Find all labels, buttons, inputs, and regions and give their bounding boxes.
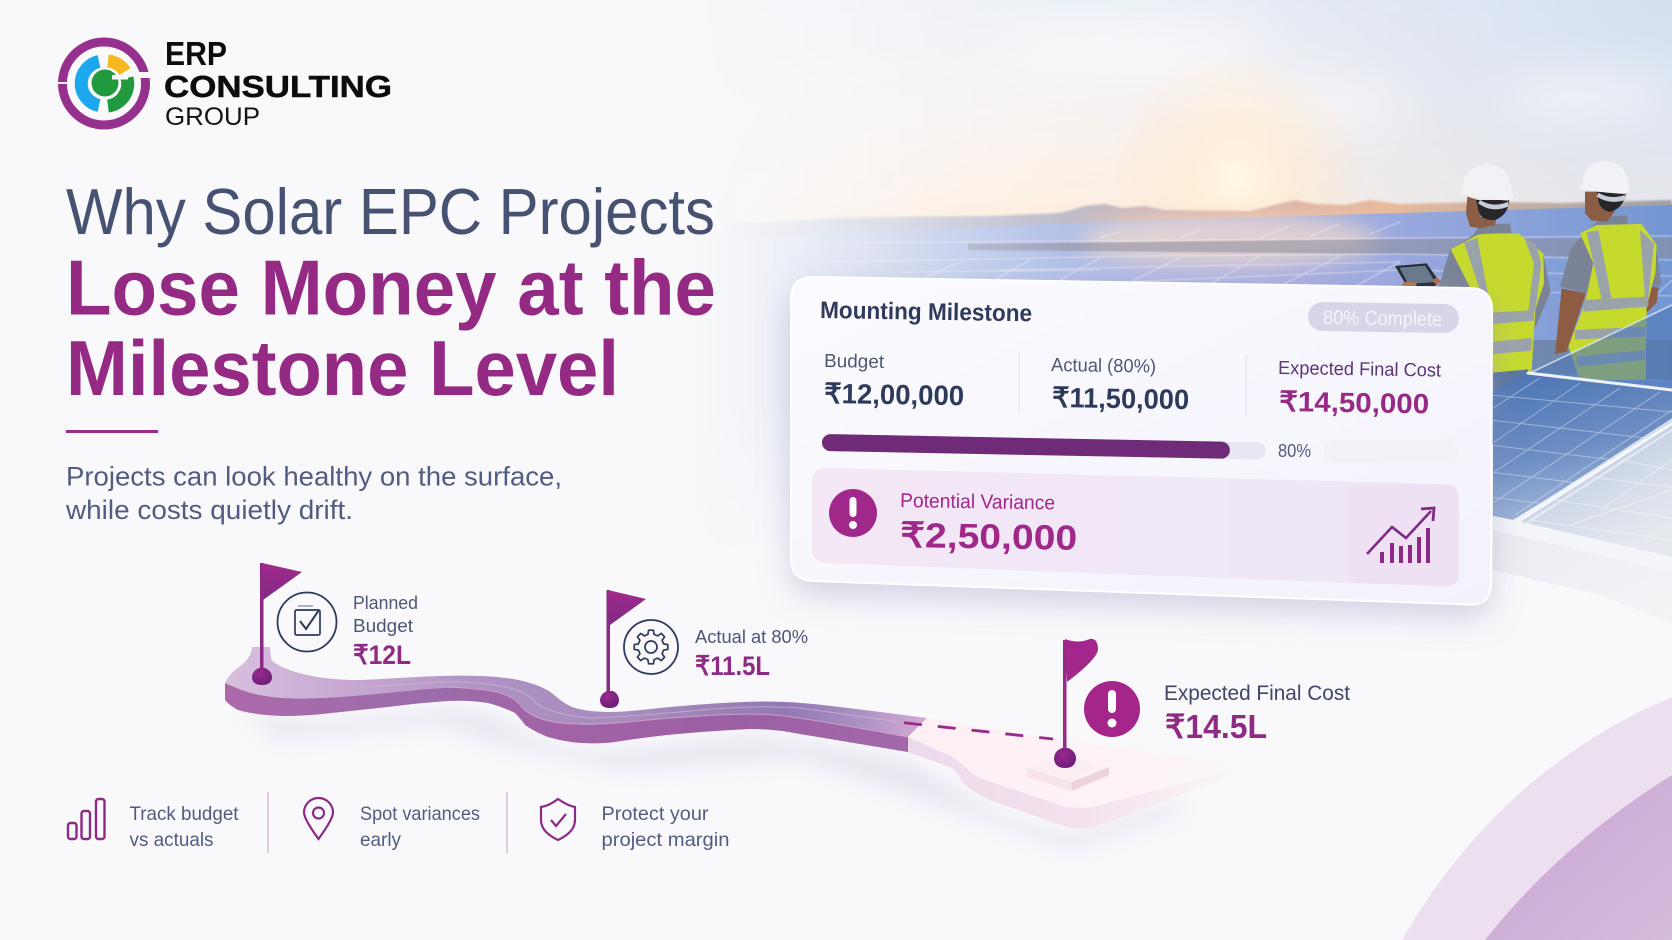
- photo bottom fade: [766, 524, 790, 542]
- dashed projection line: [897, 722, 1053, 739]
- logo wordmark: ERP: [165, 35, 227, 72]
- worker: second engineer: [1555, 161, 1662, 380]
- label: [695, 626, 808, 681]
- milestone road: [225, 647, 1235, 850]
- stat: actual: Actual (80%): [1051, 355, 1156, 378]
- field rows: [860, 221, 1672, 300]
- foreground glass panels: [1490, 305, 1672, 623]
- road centre line: [360, 682, 900, 722]
- logo: ERP Consulting Group: [56, 35, 392, 131]
- text: [360, 803, 480, 851]
- variance panel: ₹2,50,000: [900, 516, 1077, 558]
- text: early: [360, 829, 401, 851]
- shirt: [1560, 216, 1662, 294]
- icon: alert: [1084, 681, 1140, 737]
- variance panel: [812, 468, 1459, 587]
- stat: expected final cost: Expected Final Cost: [1278, 358, 1442, 382]
- decorative corner arcs: [1402, 697, 1672, 940]
- completion badge: [1308, 302, 1459, 333]
- label: Actual at 80%: [695, 626, 808, 647]
- road top surface: [225, 647, 927, 737]
- panel: mounting milestone card: [791, 277, 1492, 605]
- title divider: [66, 430, 158, 433]
- title: [66, 175, 716, 412]
- text: [602, 803, 730, 851]
- text: Protect your: [602, 803, 709, 825]
- stat: expected final cost: ₹14,50,000: [1279, 386, 1429, 419]
- text: Track budget: [130, 803, 239, 825]
- sun glow: [1140, 69, 1336, 209]
- progress bar: [822, 434, 1266, 460]
- road edge highlight: [448, 687, 908, 737]
- milestone 2: actual at 80%: [600, 590, 808, 708]
- subtitle: Projects can look healthy on the surface,: [66, 462, 562, 492]
- flag: [252, 563, 302, 685]
- text: project margin: [602, 829, 730, 851]
- white ground below photo: [640, 560, 1672, 640]
- main near panel: [1493, 373, 1672, 520]
- stat: budget: Budget: [824, 351, 885, 373]
- clouds: [1534, 70, 1654, 116]
- logo mark: [56, 42, 154, 125]
- card heading: Mounting Milestone: [820, 297, 1032, 327]
- trousers: [1493, 369, 1528, 391]
- safety vest: [1451, 233, 1544, 374]
- title: Why Solar EPC Projects: [66, 175, 715, 248]
- title: Lose Money at the: [66, 244, 716, 332]
- benefit: track budget: [68, 799, 239, 851]
- flag: [600, 590, 646, 708]
- label: Expected Final Cost: [1164, 682, 1350, 705]
- benefit: spot variances: [304, 798, 480, 851]
- label: [1164, 682, 1350, 745]
- lower faded panel: [1520, 425, 1672, 557]
- field glare: [1080, 214, 1380, 266]
- panel frame rails: [1513, 373, 1672, 526]
- stat: budget: ₹12,00,000: [824, 378, 964, 411]
- text: Spot variances: [360, 803, 480, 825]
- stat: actual: [1051, 355, 1189, 415]
- title: Milestone Level: [66, 324, 619, 412]
- subtitle: while costs quietly drift.: [65, 495, 353, 525]
- text: vs actuals: [130, 829, 214, 851]
- collar: [1473, 223, 1512, 235]
- label: [353, 592, 418, 670]
- ground between rows: [1530, 340, 1672, 380]
- stat: expected final cost: [1278, 358, 1442, 419]
- neck and head: [1466, 197, 1497, 228]
- tablet: [1395, 263, 1439, 286]
- icon: location pin: [304, 798, 333, 839]
- icon: rising chart: [1347, 484, 1459, 586]
- road side wall: [225, 683, 908, 752]
- flag: [1054, 639, 1098, 768]
- progress label: 80%: [1278, 441, 1311, 461]
- label: ₹12L: [353, 640, 411, 670]
- card body: [791, 277, 1492, 605]
- distant tree line: [720, 200, 1672, 240]
- arms: [1555, 288, 1586, 354]
- vest reflective strips: [1464, 237, 1541, 354]
- icon: bars: [68, 799, 104, 839]
- photo left fade: [640, 0, 1034, 544]
- neck and head: [1585, 192, 1615, 222]
- hard hat: [1577, 161, 1629, 194]
- label: ₹14.5L: [1165, 708, 1267, 745]
- vest reflective strips: [1575, 230, 1654, 367]
- label: ₹11.5L: [695, 651, 770, 681]
- pedestal: [1027, 755, 1109, 791]
- shirt: [1438, 224, 1551, 393]
- end platform: [908, 718, 1235, 828]
- worker: engineer with tablet: [1395, 164, 1551, 393]
- label: Planned: [353, 592, 418, 613]
- subtitle: [65, 462, 562, 525]
- stat: actual: ₹11,50,000: [1052, 382, 1189, 415]
- panel base edge: [1493, 516, 1654, 596]
- icon: shield: [541, 799, 575, 840]
- sky: [804, 0, 1672, 218]
- text: [130, 803, 239, 851]
- benefit: protect margin: [541, 799, 730, 851]
- logo: ERP Consulting Group: CONSULTING: [164, 69, 392, 104]
- variance text: Potential Variance: [900, 490, 1055, 514]
- stat: budget: [824, 351, 964, 411]
- photo: solar farm with two engineers at sunrise: [753, 0, 1672, 596]
- road shadow: [235, 708, 1180, 850]
- solar field: [750, 205, 1672, 456]
- milestone 1: planned budget: [252, 563, 418, 685]
- milestone 3: expected final cost: [1054, 639, 1350, 768]
- reflective panel: [1530, 305, 1672, 390]
- safety vest: [1568, 224, 1657, 380]
- icon: alert: [829, 489, 877, 537]
- hard hat: [1457, 164, 1514, 201]
- icon: gear: [624, 620, 678, 674]
- logo: ERP Consulting Group: GROUP: [165, 103, 260, 131]
- label: Budget: [353, 615, 413, 636]
- icon: budget checklist: [278, 592, 336, 652]
- completion badge: 80% Complete: [1323, 307, 1442, 331]
- hands: [1402, 281, 1417, 287]
